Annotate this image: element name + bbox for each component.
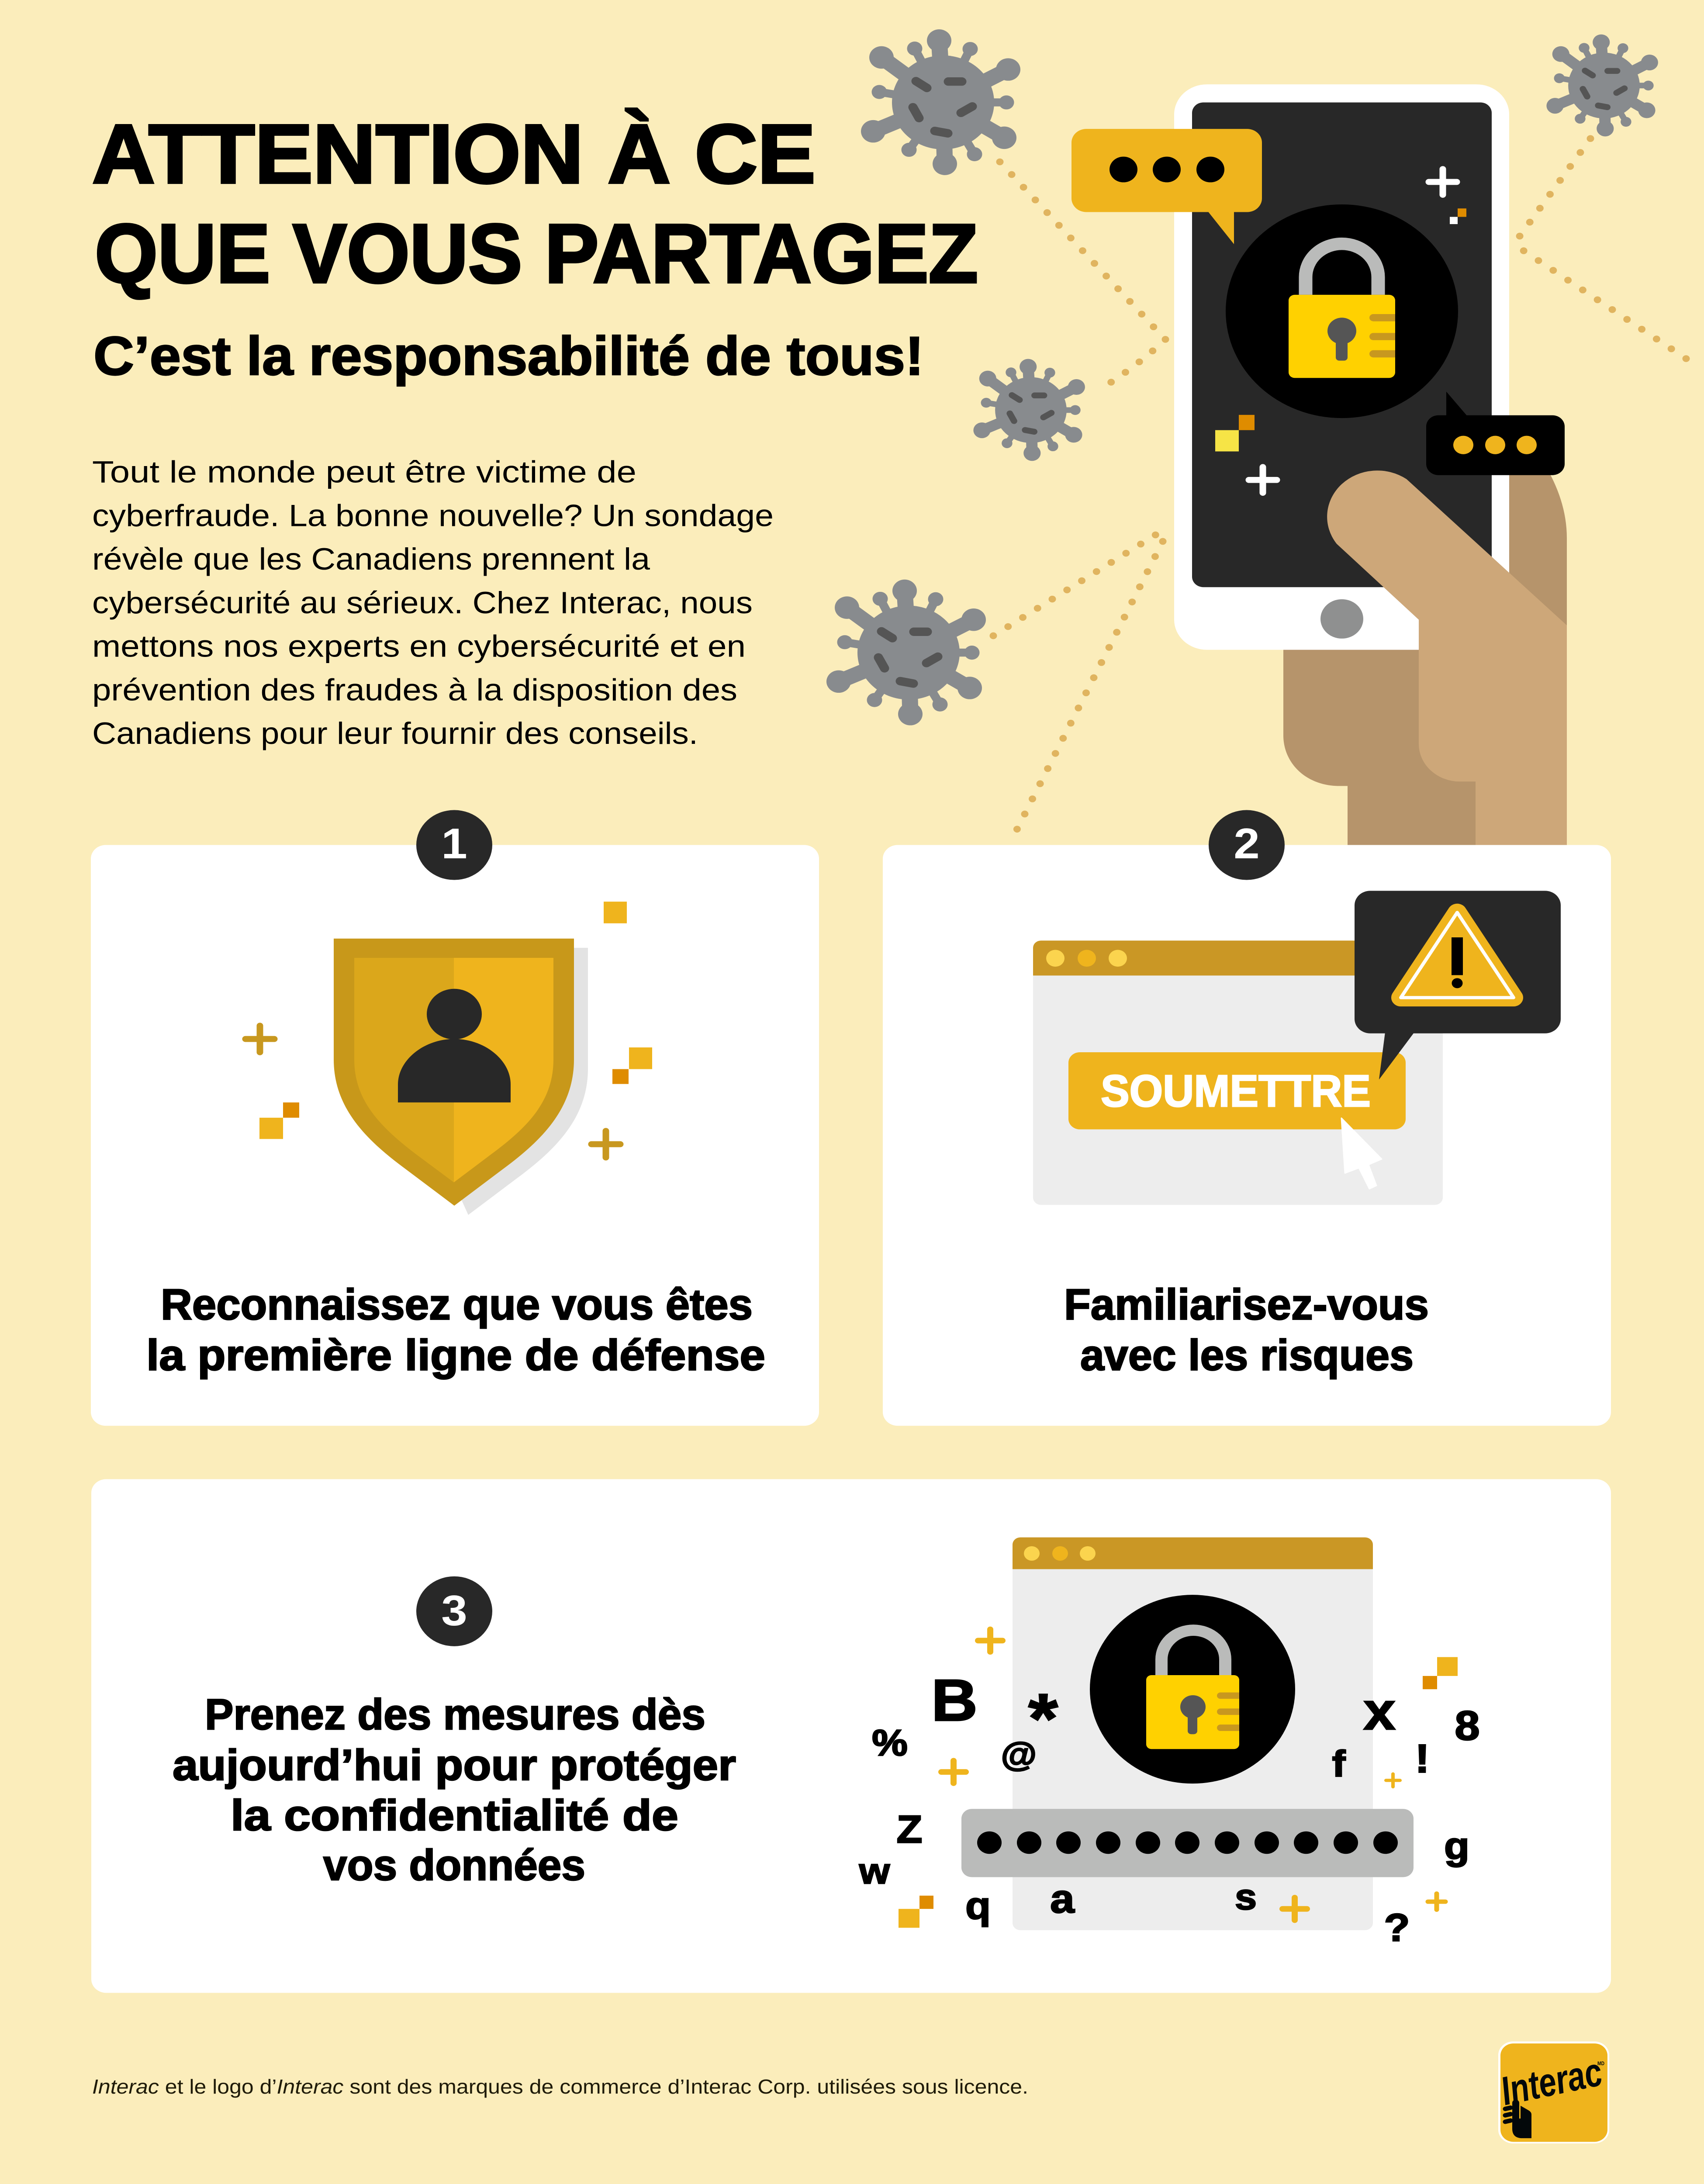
intro text block [92, 454, 774, 750]
plus left [245, 1026, 274, 1052]
heading 3 [173, 1690, 736, 1889]
floating characters: * [1028, 1679, 1058, 1758]
icon: cursor [1341, 1118, 1382, 1189]
browser window [1013, 1538, 1373, 1930]
intro text block: mettons nos experts en cybersécurité et en [92, 629, 746, 663]
squares left [259, 1102, 299, 1139]
title [92, 107, 978, 301]
floating characters: s [1235, 1877, 1257, 1917]
padlock [1289, 244, 1395, 378]
panel: step 1 [91, 810, 819, 1426]
lock circle [1226, 204, 1458, 418]
lock circle [1090, 1595, 1295, 1783]
dotted lines [993, 138, 1697, 844]
badge 3 [416, 1576, 492, 1646]
floating characters: g [1444, 1825, 1469, 1867]
badge 1 [416, 810, 492, 880]
heading 2: avec les risques [1080, 1330, 1414, 1379]
icon: virus 3 [826, 580, 986, 726]
plus signs [941, 1629, 1445, 1920]
home button [1320, 599, 1363, 639]
submit button: SOUMETTRE [1101, 1066, 1371, 1116]
plus top [1429, 169, 1457, 195]
badge 2: 2 [1234, 819, 1260, 867]
heading 3: vos données [323, 1841, 585, 1889]
floating characters: 8 [1455, 1702, 1480, 1749]
thumb and front hand [1327, 470, 1567, 845]
floating characters: a [1050, 1876, 1075, 1921]
floating characters: ? [1384, 1906, 1410, 1949]
footer legal text: Interac et le logo d’Interac sont des marques de commerce d’Interac Corp. utilisées sous licence. [92, 2076, 1028, 2098]
floating characters: Z [896, 1807, 923, 1851]
warning bubble [1355, 891, 1561, 1079]
heading 2 [1064, 1280, 1429, 1379]
panel: step 3 [91, 1479, 1611, 1993]
floating characters: f [1332, 1743, 1346, 1784]
intro text block: cybersécurité au sérieux. Chez Interac, nous [92, 585, 753, 620]
heading 3: aujourd’hui pour protéger [173, 1741, 736, 1789]
subtitle: C’est la responsabilité de tous! [93, 325, 924, 387]
heading 3: la confidentialité de [231, 1791, 678, 1839]
icon: virus 2 [973, 359, 1085, 461]
hand back [1283, 442, 1567, 845]
phone body [1174, 84, 1509, 650]
title: ATTENTION À CE [92, 107, 816, 201]
heading 1: Reconnaissez que vous êtes [161, 1280, 753, 1328]
intro text block: Canadiens pour leur fournir des conseils. [92, 716, 698, 750]
icon: virus 4 [1546, 35, 1658, 136]
squares bottom left [899, 1896, 933, 1928]
intro text block: révèle que les Canadiens prennent la [92, 542, 650, 576]
icon: virus 1 [861, 29, 1020, 175]
password field [961, 1809, 1414, 1877]
floating characters: ! [1415, 1736, 1430, 1781]
floating characters: % [872, 1722, 908, 1763]
squares right [612, 1047, 652, 1084]
badge 2 [1209, 810, 1285, 880]
squares top [1450, 208, 1466, 224]
badge 1: 1 [441, 819, 467, 867]
heading 3: Prenez des mesures dès [205, 1690, 705, 1738]
panel: step 2 [883, 810, 1611, 1426]
floating characters [859, 1667, 1480, 1949]
floating characters: B [931, 1667, 978, 1733]
floating characters: w [859, 1852, 890, 1891]
squares lower [1215, 415, 1255, 451]
intro text block: cyberfraude. La bonne nouvelle? Un sondage [92, 498, 774, 533]
intro text block: prévention des fraudes à la disposition des [92, 672, 737, 707]
logo: Interac [1496, 2042, 1609, 2143]
plus bottom [1249, 467, 1277, 493]
logo: Interac: MD [1597, 2060, 1604, 2067]
floating characters: @ [1000, 1736, 1036, 1774]
plus right [591, 1131, 620, 1158]
phone screen [1192, 102, 1492, 587]
heading 1 [146, 1280, 765, 1379]
heading 2: Familiarisez-vous [1064, 1280, 1429, 1328]
browser window [1033, 940, 1443, 1205]
intro text block: Tout le monde peut être victime de [92, 454, 636, 489]
yellow chat bubble [1071, 129, 1262, 244]
title: QUE VOUS PARTAGEZ [95, 207, 978, 301]
logo: Interac: Interac [1496, 2049, 1607, 2114]
submit button [1068, 1052, 1406, 1130]
floating characters: x [1363, 1681, 1396, 1741]
squares top right [1423, 1657, 1458, 1689]
black chat bubble [1426, 391, 1565, 475]
illustration: hand holding phone [1071, 84, 1567, 845]
floating characters: q [965, 1885, 991, 1927]
badge 3: 3 [441, 1586, 467, 1635]
padlock [1146, 1630, 1239, 1749]
icon: shield with person [334, 939, 588, 1215]
squares top right [604, 902, 627, 923]
heading 1: la première ligne de défense [146, 1330, 765, 1379]
